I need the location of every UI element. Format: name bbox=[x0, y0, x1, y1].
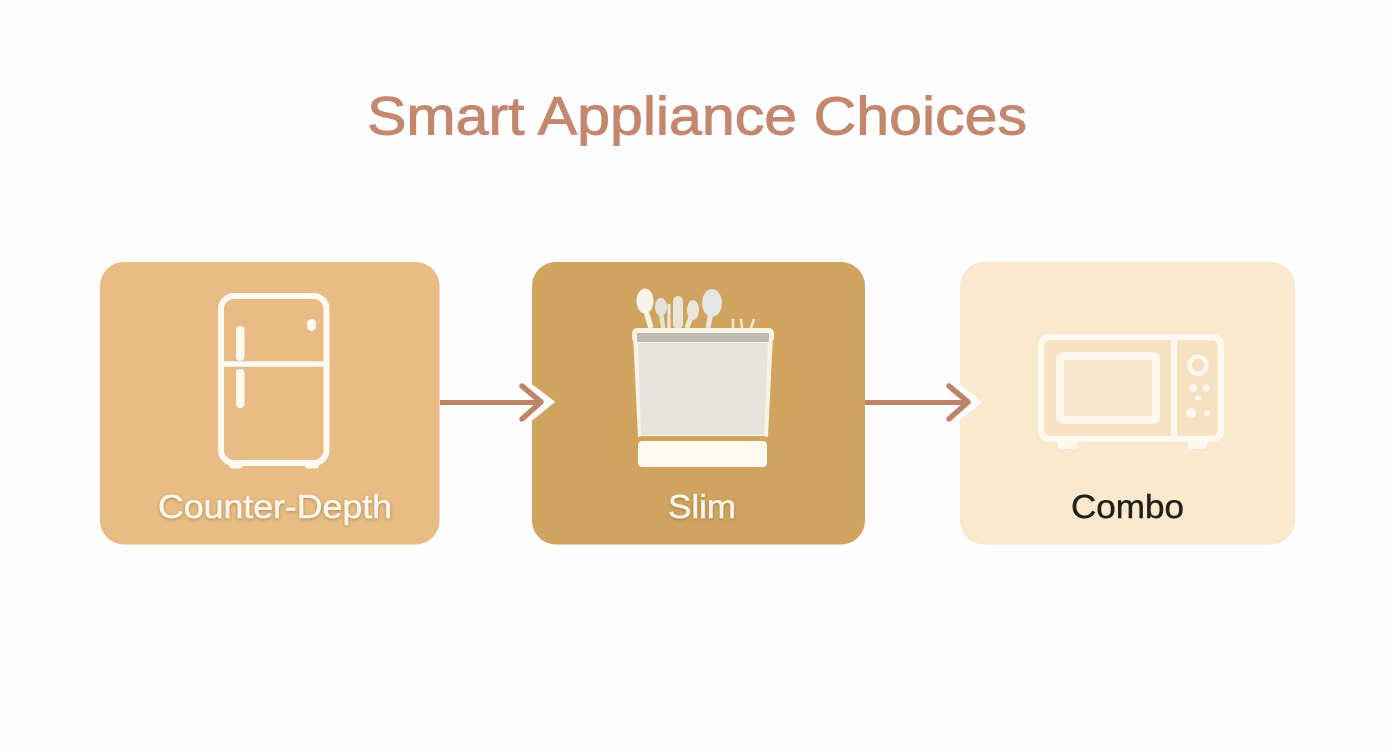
icon: microwave bbox=[1041, 337, 1221, 449]
label: Slim: Slim bbox=[668, 488, 736, 525]
panel: combo bbox=[960, 262, 1295, 544]
icon: slim utensil bin bbox=[632, 288, 774, 467]
label: Counter-Depth: Counter-Depth bbox=[158, 488, 392, 525]
arrow: counter-depth to slim bbox=[440, 386, 543, 419]
icon: refrigerator bbox=[221, 296, 326, 468]
title: Smart Appliance Choices bbox=[367, 86, 1027, 146]
arrow: slim to combo bbox=[865, 386, 970, 419]
panel: counter-depth bbox=[100, 262, 440, 544]
panel: slim bbox=[532, 262, 865, 544]
label: Combo: Combo bbox=[1071, 488, 1184, 525]
